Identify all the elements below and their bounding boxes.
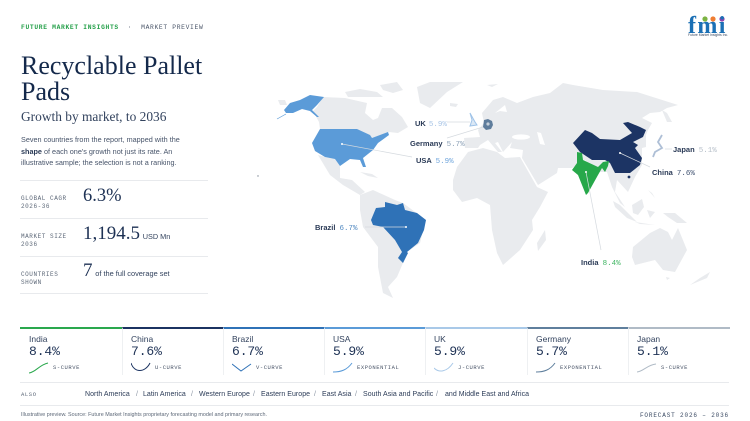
regions list: / <box>436 391 438 398</box>
title: Pads <box>21 76 70 106</box>
card: USA <box>324 327 425 375</box>
stat: countries shown: SHOWN <box>21 279 42 286</box>
country: Germany <box>483 119 493 130</box>
label: Brazil: Brazil 6.7% <box>315 223 358 233</box>
country: China <box>573 122 646 178</box>
regions list: and Middle East and Africa <box>445 391 529 398</box>
logo dots <box>702 16 725 22</box>
label: Japan: Japan 5.1% <box>673 145 717 155</box>
regions list: / <box>136 391 138 398</box>
curve <box>434 362 454 372</box>
regions list: / <box>253 391 255 398</box>
card: India <box>20 327 122 375</box>
stat: countries shown <box>21 260 170 286</box>
label: Germany: Germany 5.7% <box>410 139 465 149</box>
title <box>21 51 202 106</box>
card: India: India <box>29 334 47 344</box>
country: Brazil <box>371 202 426 263</box>
card: China: China <box>131 334 153 344</box>
country: Japan <box>653 135 662 157</box>
stat: countries shown: COUNTRIES <box>21 271 58 278</box>
label: India: India 8.4% <box>581 258 621 268</box>
card: China: 7.6% <box>131 344 162 359</box>
leader lines <box>342 122 672 250</box>
card: UK <box>425 327 527 375</box>
stat: countries shown: 7 of the full coverage set <box>83 260 170 281</box>
card: USA: USA <box>333 334 350 344</box>
label: USA: USA 5.9% <box>416 156 454 166</box>
subtitle: Growth by market, to 2036 <box>21 109 166 124</box>
card: Brazil: Brazil <box>232 334 253 344</box>
curve <box>131 362 150 371</box>
logo: fmi <box>688 13 727 39</box>
regions list: / <box>355 391 357 398</box>
regions list: Eastern Europe <box>261 391 310 398</box>
stat: global CAGR: 2026-36 <box>21 203 50 210</box>
card: Brazil <box>223 327 324 375</box>
intro text: Seven countries from the report, mapped with the <box>21 135 180 144</box>
stat: global CAGR: GLOBAL CAGR <box>21 195 67 202</box>
card: Brazil: V-CURVE <box>256 364 283 371</box>
country: India <box>572 152 609 195</box>
card: India: S-CURVE <box>53 364 80 371</box>
eyebrow: FUTURE MARKET INSIGHTS · MARKET PREVIEW <box>21 24 203 31</box>
card: India: 8.4% <box>29 344 60 359</box>
curve <box>333 362 352 372</box>
regions list: North America <box>85 391 130 398</box>
card: China <box>122 327 223 375</box>
card: Germany: Germany <box>536 334 571 344</box>
regions list: / <box>314 391 316 398</box>
intro text: shape of each one's growth not just its rate. An <box>21 146 172 156</box>
stat: global CAGR <box>21 186 122 210</box>
stat: market size: 1,194.5 USD Mn <box>83 223 170 244</box>
regions list: Western Europe <box>199 391 250 398</box>
intro text <box>21 135 180 167</box>
country: USA <box>277 95 389 167</box>
card: Japan: S-CURVE <box>661 364 688 371</box>
card: UK: 5.9% <box>434 344 465 359</box>
footer source: Illustrative preview. Source: Future Market Insights proprietary forecasting model and primary research. <box>21 412 267 418</box>
also label: ALSO <box>21 391 37 398</box>
logo: Future Market Insights Inc. <box>688 33 728 37</box>
regions list: / <box>191 391 193 398</box>
card: Germany <box>527 327 628 375</box>
card: Japan <box>628 327 730 375</box>
card: USA: 5.9% <box>333 344 364 359</box>
card: UK: J-CURVE <box>458 364 485 371</box>
card: UK: UK <box>434 334 446 344</box>
stat: market size: MARKET SIZE <box>21 233 67 240</box>
curve <box>29 362 48 374</box>
card: Brazil: 6.7% <box>232 344 263 359</box>
stat: market size: 2036 <box>21 241 38 248</box>
stat: global CAGR: 6.3% <box>83 186 122 206</box>
card: Japan: 5.1% <box>637 344 668 359</box>
curve <box>232 364 252 372</box>
title: Recyclable Pallet <box>21 51 202 80</box>
country: UK <box>470 113 477 126</box>
card: Germany: 5.7% <box>536 344 567 359</box>
label: China: China 7.6% <box>652 168 695 178</box>
curve <box>637 364 656 372</box>
inland seas <box>495 105 545 145</box>
intro text: illustrative sample; the selection is not a ranking. <box>21 158 177 167</box>
card: Germany: EXPONENTIAL <box>560 364 602 371</box>
card: USA: EXPONENTIAL <box>357 364 399 371</box>
label: UK: UK 5.9% <box>415 119 447 129</box>
marker dots <box>341 143 621 228</box>
stat: market size <box>21 223 170 248</box>
regions list: Latin America <box>143 391 186 398</box>
card: China: U-CURVE <box>155 364 182 371</box>
regions list: East Asia <box>322 391 351 398</box>
grey landmasses <box>278 82 710 298</box>
footer forecast: FORECAST 2026 – 2036 <box>640 412 729 419</box>
curve <box>536 362 556 372</box>
card: Japan: Japan <box>637 334 660 344</box>
small island dot <box>257 175 259 177</box>
regions list: South Asia and Pacific <box>363 391 433 398</box>
